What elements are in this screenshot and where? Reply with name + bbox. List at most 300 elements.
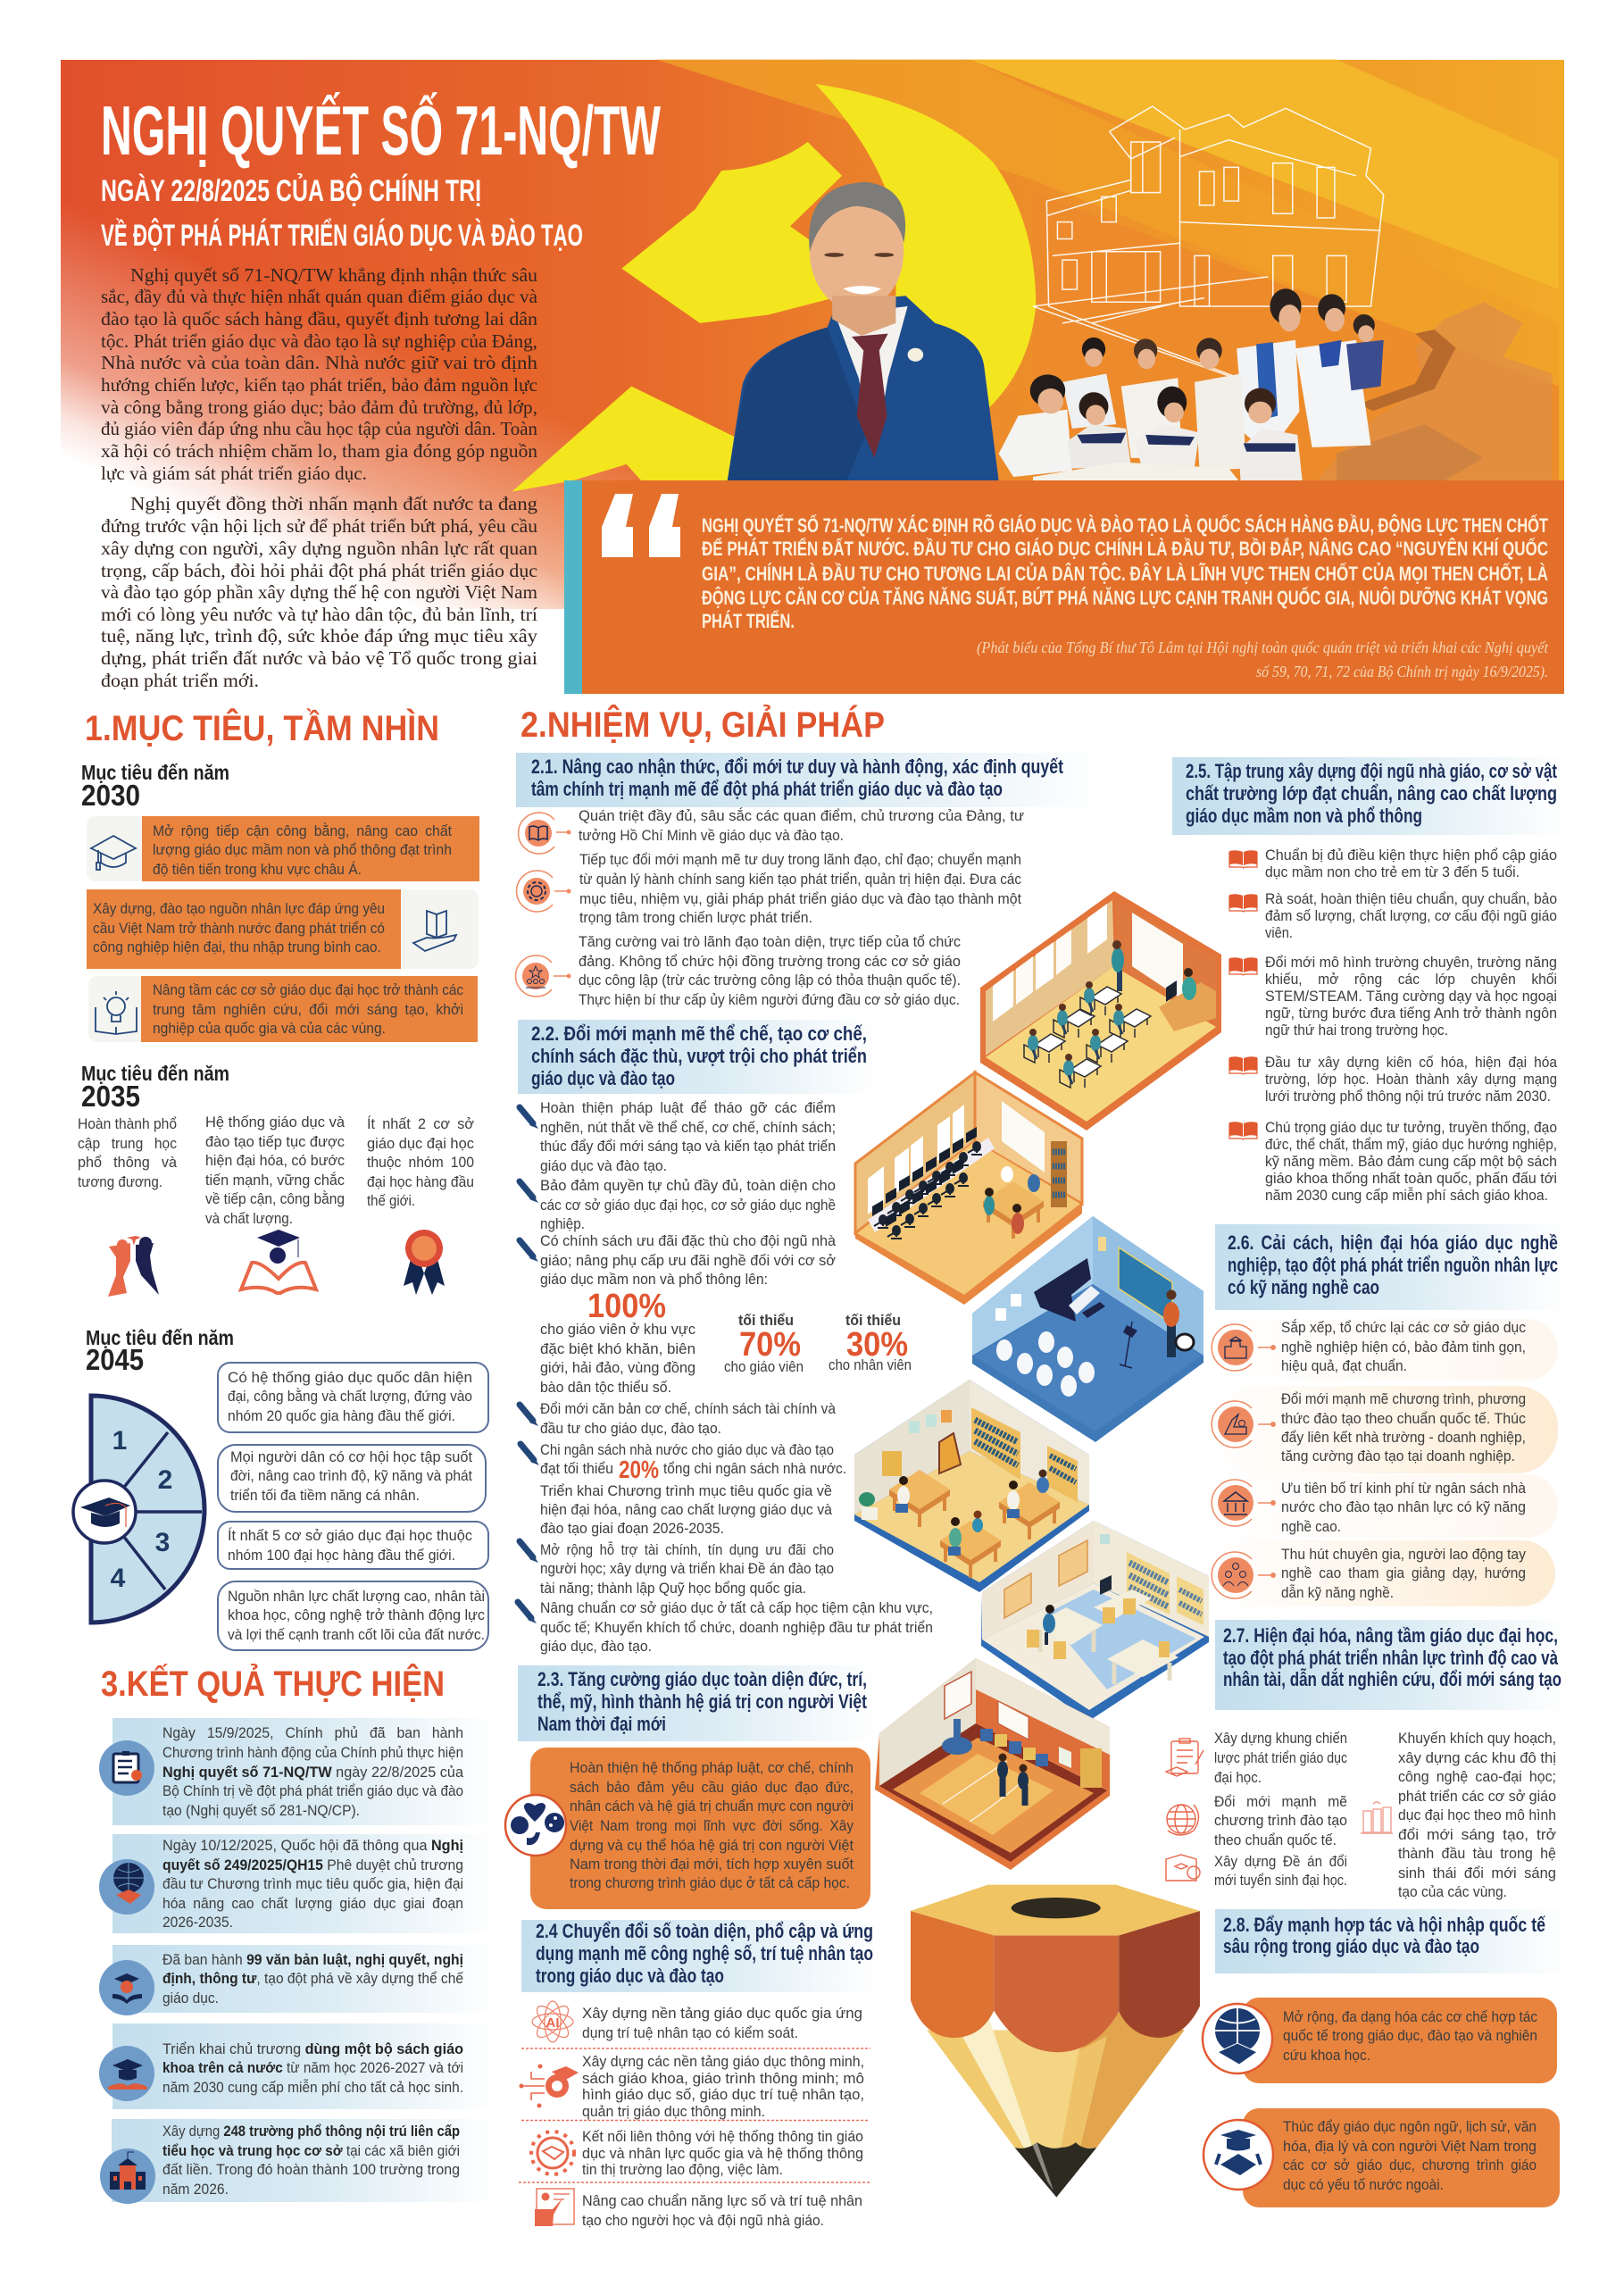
intro paragraphs: và đào tạo góp phần xây dựng thế hệ con người Việt Nam: [101, 581, 537, 603]
bullet 2.2 a: Hoàn thiện pháp luật để tháo gỡ các điểm: [540, 1099, 836, 1116]
item 2.6 b: Đổi mới mạnh mẽ chương trình, phương: [1281, 1390, 1526, 1407]
bullet 2.2 d: Đổi mới căn bản cơ chế, chính sách tài chính và: [540, 1400, 836, 1417]
bullet 2.2 d: [520, 1400, 836, 1437]
panel: 2.3 content: [505, 1748, 870, 1909]
2030 row 1: độ tiên tiến trong khu vực châu Á.: [153, 861, 362, 878]
result 4: năm 2030 cung cấp miễn phí cho tất cả học sinh.: [162, 2079, 463, 2096]
item 2.1 b: Tiếp tục đổi mới mạnh mẽ tư duy trong lãnh đạo, chỉ đạo; chuyển mạnh: [579, 851, 1021, 868]
item 2.4 b: sách giáo khoa, giáo trình thông minh; mô: [582, 2070, 864, 2087]
2045 box 2: triển tối đa tiềm năng cá nhân.: [230, 1487, 420, 1504]
list 2.5 b: viên.: [1265, 925, 1293, 941]
item 2.7 d: dục đại học theo mô hình: [1398, 1806, 1556, 1823]
bullet 2.2 e: [521, 1441, 846, 1537]
item 2.1 c: Thực hiện bí thư cấp ủy kiêm người đứng đầu cơ sở giáo dục.: [579, 991, 960, 1008]
list 2.5 e: đức, thể chất, thẩm mỹ, giáo dục hướng nghiệp,: [1265, 1137, 1557, 1153]
icon: globe and handshake: [1203, 2004, 1272, 2073]
heading: target 2045: 2045: [86, 1343, 144, 1376]
panel: 2.8 box 2: [1203, 2108, 1560, 2207]
item 2.7 b: chương trình đào tạo: [1214, 1812, 1347, 1829]
panel: 2.5 heading: giáo dục mầm non và phổ thông: [1186, 805, 1422, 827]
heading: target 2030: Mục tiêu đến năm: [81, 761, 229, 784]
result 2: [99, 1834, 497, 1933]
intro paragraphs: Nhà nước và của toàn dân. Nhà nước giữ vai trò định: [101, 352, 538, 373]
item 2.7 d: Khuyến khích quy hoạch,: [1398, 1730, 1556, 1747]
icon: experts meeting: [1212, 1552, 1276, 1598]
item 2.7 b: theo chuẩn quốc tế.: [1214, 1831, 1337, 1848]
2045 box 2: Mọi người dân có cơ hội học tập suốt: [230, 1448, 472, 1465]
result 1: Bộ Chính trị về đột phá phát triển giáo dục và đào: [162, 1783, 463, 1799]
icon: book: [1229, 1122, 1257, 1139]
result 5: đất liền. Trong đó hoàn thành 100 trường trong: [162, 2162, 460, 2178]
panel: 2.3 heading: thể, mỹ, hình thành hệ giá trị con người Việt: [537, 1690, 868, 1713]
list 2.5 c: STEM/STEAM. Tăng cường dạy và học ngoại: [1265, 989, 1557, 1005]
icon: AI atom: [532, 2001, 573, 2042]
panel: 2.4 heading: [521, 1920, 877, 1992]
bullet 2.2 c: [520, 1232, 837, 1288]
panel: 2.6 heading: [1215, 1224, 1569, 1310]
bullet 2.2 f: người học; xây dựng và triển khai Đề án đào tạo: [540, 1560, 834, 1577]
panel: 2.2 heading: [518, 1020, 877, 1094]
icon: cap on book: [108, 2059, 147, 2090]
icon: gear in circle: [517, 871, 571, 912]
result 2: 2026-2035.: [162, 1915, 233, 1931]
bullet 2.2 e: Triển khai Chương trình mục tiêu quốc gia về: [540, 1482, 832, 1499]
item 2.7 d: đổi mới sáng tạo, trở: [1398, 1826, 1556, 1843]
bullet 2.2 a: thúc đẩy đổi mới sáng tạo và kiến tạo phát triển: [540, 1138, 836, 1155]
result 4: Triển khai chủ trương dùng một bộ sách giáo: [162, 2041, 463, 2057]
stat 30%: cho nhân viên: [829, 1356, 912, 1373]
bullet 2.2 f: [520, 1541, 834, 1597]
stat 100%: đặc biệt khó khăn, biên: [540, 1340, 695, 1357]
bullet 2.2 e: hiện đại hóa, nâng cao chất lượng giáo dục và: [540, 1501, 832, 1518]
icon: book on hand: [413, 911, 456, 951]
intro paragraphs: sắc, đầy đủ và thực hiện nhất quán quan điểm giáo dục và: [101, 286, 538, 307]
title: [101, 91, 661, 253]
item 2.6 d: nghề cao tham gia giảng dạy, hướng: [1281, 1564, 1526, 1581]
panel: 2.6 heading: có kỹ năng nghề cao: [1228, 1276, 1379, 1298]
hero banner background: [61, 60, 1564, 609]
item 2.6 c: nghề cao.: [1281, 1518, 1341, 1535]
bullet 2.2 g: quốc tế; Khuyến khích tổ chức, doanh nghiệp đầu tư phát triển: [540, 1619, 933, 1636]
bullet 2.2 a: giáo dục và đào tạo.: [540, 1157, 667, 1174]
result 2: Ngày 10/12/2025, Quốc hội đã thông qua Nghị: [162, 1838, 463, 1854]
item 2.6 c: [1210, 1474, 1558, 1538]
item 2.1 b: trọng tâm trong chiến lược phát triển.: [579, 909, 812, 926]
2035 column 2: và chất lượng.: [205, 1210, 293, 1227]
stat 70%: tối thiểu: [738, 1312, 794, 1329]
item 2.6 b: [1210, 1386, 1558, 1473]
intro paragraphs: Nghị quyết đồng thời nhấn mạnh đất nước ta đang: [130, 493, 538, 514]
item 2.6 b: đẩy liên kết nhà trường - doanh nghiệp,: [1281, 1429, 1526, 1446]
icon: pen bullet: [520, 1107, 538, 1129]
2045 box 2: đời, nâng cao trình độ, kỹ năng và phát: [230, 1467, 472, 1484]
item 2.6 d: Thu hút chuyên gia, người lao động tay: [1281, 1546, 1526, 1563]
icon: connected handshake: [531, 2132, 574, 2174]
2035 column 3: đại học hàng đầu: [367, 1173, 474, 1190]
result 4: [99, 2023, 497, 2109]
bullet 2.2 e: Chi ngân sách nhà nước cho giáo dục và đào tạo: [540, 1441, 834, 1458]
item 2.6 a: nghề nghiệp hiện có, bảo đảm tinh gọn,: [1281, 1339, 1526, 1356]
panel: 2.1 heading: tâm chính trị mạnh mẽ để đột phá phát triển giáo dục và đào tạo: [531, 778, 1003, 800]
result 5: Xây dựng 248 trường phổ thông nội trú liên cấp: [162, 2123, 460, 2140]
panel: 2.3 heading: Nam thời đại mới: [537, 1713, 666, 1735]
panel: 2.8 box 2: hóa, địa lý và con người Việt Nam trong: [1283, 2138, 1537, 2155]
2035 column 3: giáo dục đại học: [367, 1135, 474, 1152]
item 2.7 b: Đổi mới mạnh mẽ: [1214, 1793, 1347, 1810]
stat 100%: cho giáo viên ở khu vực: [540, 1321, 695, 1338]
result 3: Đã ban hành 99 văn bản luật, nghị quyết, nghị: [162, 1952, 463, 1968]
isometric room: study hall: [981, 1521, 1209, 1721]
heading: target 2035: [81, 1062, 229, 1113]
panel: 2.3 content: Hoàn thiện hệ thống pháp luật, cơ chế, chính: [570, 1759, 854, 1776]
icon: teacher with board: [535, 2189, 574, 2226]
list 2.5 a: Chuẩn bị đủ điều kiện thực hiện phổ cập giáo: [1265, 847, 1557, 864]
item 2.7 d: sinh thái đổi mới sáng: [1398, 1865, 1556, 1881]
item 2.6 b: thức đào tạo theo chuẩn quốc tế. Thúc: [1281, 1410, 1526, 1427]
bullet 2.2 f: Mở rộng hỗ trợ tài chính, tín dụng ưu đãi cho: [540, 1541, 834, 1558]
heading: target 2030: [81, 761, 229, 812]
panel: 2.8 box 1: quốc tế trong giáo dục, đào tạo và nghiên: [1283, 2027, 1537, 2044]
result 1: Chương trình hành động của Chính phủ thực hiện: [162, 1745, 463, 1761]
item 2.4 a: [532, 2001, 862, 2042]
quote panel: [564, 480, 1564, 694]
panel: 2.3 content: dựng và cụ thể hóa hệ giá trị con người Việt: [570, 1837, 854, 1854]
quote panel: số 59, 70, 71, 72 của Bộ Chính trị ngày 16/9/2025).: [1256, 663, 1548, 681]
panel: 2.8 heading: 2.8. Đẩy mạnh hợp tác và hội nhập quốc tế: [1223, 1914, 1546, 1936]
panel: 2.4 heading: trong giáo dục và đào tạo: [536, 1965, 724, 1987]
result 3: giáo dục.: [162, 1990, 219, 2007]
semicircle diagram 2045: 2: [158, 1465, 172, 1495]
item 2.1 b: mục tiêu, nhiệm vụ, giải pháp phát triển giáo dục và đào tạo thành một: [579, 890, 1021, 907]
item 2.1 a: tưởng Hồ Chí Minh về giáo dục và đào tạo.: [579, 827, 844, 844]
icon: bank in circle: [1212, 1480, 1276, 1526]
item 2.6 c: nước cho đào tạo nhân lực có kỹ năng: [1281, 1498, 1526, 1515]
panel: 2.8 box 1: Mở rộng, đa dạng hóa các cơ chế hợp tác: [1283, 2008, 1537, 2025]
icon: graduation cap: [80, 1498, 130, 1527]
bullet 2.2 f: tài năng; thành lập Quỹ học bổng quốc gia.: [540, 1580, 806, 1597]
item 2.7 a: [1166, 1730, 1347, 1786]
2045 box 3: Ít nhất 5 cơ sở giáo dục đại học thuộc: [228, 1527, 472, 1544]
list 2.5 e: giáo khoa thống nhất toàn quốc, phấn đấu tới: [1265, 1171, 1557, 1187]
item 2.7 d: [1361, 1730, 1556, 1900]
panel: 2.3 heading: 2.3. Tăng cường giáo dục toàn diện đức, trí,: [537, 1668, 867, 1690]
panel: 2.4 heading: dụng mạnh mẽ công nghệ số, trí tuệ nhân tạo: [536, 1942, 873, 1965]
result 3: [99, 1945, 497, 2015]
list 2.5 a: dục mầm non cho trẻ em từ 3 đến 5 tuổi.: [1265, 864, 1520, 880]
portrait of General Secretary: [728, 182, 999, 480]
intro paragraphs: đứng trước vận hội lịch sử để phát triển bứt phá, yêu cầu: [101, 515, 538, 537]
panel: 2.2 heading: 2.2. Đổi mới mạnh mẽ thể chế, tạo cơ chế,: [531, 1022, 867, 1045]
2035 column 1: phổ thông và: [78, 1154, 178, 1171]
list 2.5 c: [1229, 955, 1557, 1039]
result 1: tạo (Nghị quyết số 281-NQ/CP).: [162, 1803, 360, 1819]
stat 30%: [829, 1312, 912, 1373]
item 2.4 b: quản trị giáo dục thông minh.: [582, 2103, 765, 2120]
isometric room: library: [854, 1380, 1089, 1592]
intro paragraphs: đủ giáo viên đáp ứng nhu cầu học tập của người dân. Toàn: [101, 418, 537, 439]
icon: pen bullet: [521, 1444, 539, 1465]
icon: people reaching star: [108, 1230, 159, 1297]
panel: 2.1 heading: [516, 753, 1105, 807]
heading: section 3: 3.KẾT QUẢ THỰC HIỆN: [101, 1663, 445, 1704]
result 4: khoa trên cả nước từ năm học 2026-2027 và tới: [162, 2060, 463, 2076]
semicircle diagram 2045: 3: [155, 1528, 170, 1557]
2045 box 4: [218, 1581, 488, 1650]
bullet 2.2 b: các cơ sở giáo dục đại học, cơ sở giáo dục nghề: [540, 1197, 836, 1214]
icon: graduation cap: [91, 836, 136, 870]
intro paragraphs: mới có lòng yêu nước và tự hào dân tộc, đủ bản lĩnh, trí: [101, 604, 537, 625]
bullet 2.2 c: giáo dục mầm non và phổ thông lên:: [540, 1271, 768, 1288]
intro paragraphs: đào tạo là quốc sách hàng đầu, quyết định tương lai dân: [101, 308, 538, 330]
bullet 2.2 c: giáo; nâng phụ cấp ưu đãi nghề đối với cơ sở: [540, 1252, 836, 1269]
panel: 2.5 heading: [1172, 757, 1569, 835]
icon: light bulb on book: [96, 991, 137, 1034]
item 2.7 a: đại học.: [1214, 1769, 1262, 1786]
icon: book: [1229, 1056, 1257, 1074]
icon: cap and handshake: [1203, 2120, 1273, 2190]
list 2.5 d: [1229, 1055, 1558, 1105]
list 2.5 e: năm 2030 cung cấp miễn phí sách giáo khoa.: [1265, 1187, 1548, 1204]
item 2.4 d: Nâng cao chuẩn năng lực số và trí tuệ nhân: [582, 2192, 862, 2209]
intro paragraphs: lực và giám sát phát triển giáo dục.: [101, 463, 367, 484]
2045 box 2: [218, 1445, 486, 1512]
isometric room: classroom: [980, 891, 1221, 1130]
bullet 2.2 g: Nâng chuẩn cơ sở giáo dục ở tất cả cấp học tiệm cận khu vực,: [540, 1599, 933, 1616]
item 2.4 d: tạo cho người học và đội ngũ nhà giáo.: [582, 2212, 824, 2229]
2030 row 3: Nâng tầm các cơ sở giáo dục đại học trở thành các: [153, 981, 463, 998]
item 2.1 b: từ quản lý hành chính sang kiến tạo phát triển, quản trị hiện đại. Đưa các: [579, 871, 1021, 888]
list 2.5 d: Đầu tư xây dựng kiên cố hóa, hiện đại hóa: [1265, 1055, 1558, 1071]
item 2.4 a: AI: [546, 2015, 559, 2031]
title: NGÀY 22/8/2025 CỦA BỘ CHÍNH TRỊ: [101, 173, 481, 208]
pencil illustration: [911, 1885, 1200, 2198]
semicircle diagram 2045: 4: [111, 1564, 126, 1593]
item 2.7 d: tạo của các vùng.: [1398, 1883, 1507, 1900]
2035 column 3: Ít nhất 2 cơ sở: [367, 1115, 474, 1132]
intro paragraphs: dựng, phát triển đất nước và bảo vệ Tổ quốc trong giai: [101, 647, 537, 669]
item 2.7 b: [1167, 1793, 1347, 1848]
title: VỀ ĐỘT PHÁ PHÁT TRIỂN GIÁO DỤC VÀ ĐÀO TẠO: [101, 218, 583, 253]
item 2.7 c: Xây dựng Đề án đổi: [1214, 1853, 1347, 1870]
result 5: tiểu học và trung học cơ sở tại các xã biên giới: [162, 2143, 460, 2159]
2035 column 2: [205, 1114, 346, 1227]
result 5: [100, 2119, 497, 2204]
panel: 2.8 box 2: dục có yếu tố nước ngoài.: [1283, 2176, 1444, 2193]
result 2: đầu tư Chương trình mục tiêu quốc gia, hiện đại: [162, 1876, 463, 1892]
2030 row 2: công nghiệp hiện đại, thu nhập trung bình cao.: [93, 939, 381, 955]
panel: 2.8 box 2: Thúc đẩy giáo dục ngôn ngữ, lịch sử, văn: [1283, 2118, 1537, 2135]
isometric room: gym: [875, 1658, 1110, 1870]
heading: target 2045: Mục tiêu đến năm: [86, 1326, 234, 1349]
result 1: Ngày 15/9/2025, Chính phủ đã ban hành: [162, 1725, 463, 1741]
2035 column 2: về tiếp cận, công bằng: [205, 1190, 345, 1207]
panel: 2.3 heading: [518, 1665, 877, 1741]
item 2.6 b: tăng cường đào tạo tại doanh nghiệp.: [1281, 1448, 1515, 1464]
list 2.5 c: Đổi mới mô hình trường chuyên, trường năng: [1265, 955, 1557, 971]
panel: 2.3 content: sách bảo đảm yêu cầu giáo dục đạo đức,: [570, 1779, 854, 1796]
list 2.5 c: ngữ thứ hai trong trường học.: [1265, 1022, 1448, 1039]
item 2.7 a: Xây dựng khung chiến: [1214, 1730, 1347, 1747]
list 2.5 d: trường, lớp học. Hoàn thành xây dựng mạng: [1265, 1072, 1557, 1088]
item 2.7 a: lược phát triển giáo dục: [1214, 1749, 1347, 1766]
2045 box 1: nhóm 20 quốc gia hàng đầu thế giới.: [228, 1407, 455, 1424]
intro paragraphs: Nghị quyết số 71-NQ/TW khẳng định nhận thức sâu: [130, 264, 538, 286]
item 2.6 a: [1210, 1319, 1558, 1381]
item 2.4 b: [520, 2053, 864, 2120]
bullet 2.2 a: nghẽn, nút thắt về thể chế, cơ chế, chính sách;: [540, 1119, 836, 1136]
panel: 2.8 box 1: cứu khoa học.: [1283, 2047, 1370, 2064]
list 2.5 c: ngữ, từng bước đưa tiếng Anh trở thành ngôn: [1265, 1005, 1557, 1022]
panel: 2.1 heading: 2.1. Nâng cao nhận thức, đổi mới tư duy và hành động, xác định quyết: [531, 755, 1064, 778]
bullet 2.2 e: 20%: [619, 1456, 659, 1483]
2045 box 4: và lợi thế cạnh tranh cốt lõi của đất nước.: [228, 1626, 485, 1643]
result 1: Nghị quyết số 71-NQ/TW ngày 22/8/2025 của: [162, 1765, 464, 1781]
stat 70%: 70%: [739, 1326, 801, 1364]
item 2.6 a: Sắp xếp, tổ chức lại các cơ sở giáo dục: [1281, 1319, 1526, 1336]
heading: section 1: 1.MỤC TIÊU, TẦM NHÌN: [85, 707, 439, 748]
title: NGHỊ QUYẾT SỐ 71-NQ/TW: [101, 91, 661, 170]
bullet 2.2 g: giáo dục, đào tạo.: [540, 1638, 652, 1655]
2035 column 1: [78, 1115, 178, 1190]
item 2.1 a: [519, 807, 1024, 854]
panel: 2.3 content: nhân cách và hệ giá trị chuẩn mực con người: [570, 1798, 854, 1815]
2030 row 2: cầu Việt Nam trở thành nước đang phát triển có: [93, 920, 385, 937]
2030 row 3: nghiệp của quốc gia và của các vùng.: [153, 1020, 386, 1037]
result 2: hóa nâng cao chất lượng giáo dục giai đoạn: [162, 1896, 463, 1912]
hammer and sickle emblem: [512, 84, 1036, 492]
icon: strategy clipboard: [1166, 1739, 1203, 1776]
item 2.1 c: Tăng cường vai trò lãnh đạo toàn diện, trực tiếp của tổ chức: [579, 933, 961, 950]
icon: team with star: [516, 955, 571, 997]
item 2.7 c: [1166, 1853, 1347, 1889]
item 2.4 c: dục và nhân lực quốc gia và hệ thống thông: [582, 2145, 863, 2162]
list 2.5 e: kỹ năng mềm. Bảo đảm cung cấp một bộ sách: [1265, 1154, 1557, 1170]
2035 column 2: tiến mạnh, vững chắc: [205, 1172, 345, 1189]
list 2.5 c: khiếu, mở rộng các lớp chuyên khối: [1265, 972, 1557, 988]
isometric room: computer lab: [855, 1072, 1082, 1305]
panel: 2.8 box 2: các cơ sở giáo dục, chương trình giáo: [1283, 2157, 1537, 2173]
list 2.5 d: lưới trường phổ thông nội trú trước năm 2030.: [1265, 1089, 1551, 1105]
stat 100%: 100%: [587, 1288, 666, 1325]
stat 70%: [724, 1312, 804, 1375]
intro paragraphs: hướng chiến lược, kiến tạo phát triển, bảo đảm nguồn lực: [101, 374, 537, 396]
icon: book: [1229, 850, 1257, 868]
2030 row 2: [87, 889, 479, 969]
heading: section 2: 2.NHIỆM VỤ, GIẢI PHÁP: [521, 704, 885, 745]
panel: 2.3 content: trong chương trình giáo dục ở tất cả cấp học.: [570, 1874, 850, 1891]
intro paragraphs: trọng, cấp bách, đòi hỏi phải đột phá phát triển giáo dục: [101, 560, 537, 581]
item 2.1 c: đảng. Không tổ chức hội đồng trường trong các cơ sở giáo: [579, 953, 961, 970]
list 2.5 b: Rà soát, hoàn thiện tiêu chuẩn, quy chuẩn, bảo: [1265, 891, 1557, 907]
item 2.4 b: hình giáo dục số, giáo dục trí tuệ nhân tạo,: [582, 2086, 864, 2103]
intro paragraphs: tuệ, năng lực, trình độ, sức khỏe đáp ứng mục tiêu xây: [101, 625, 538, 647]
bullet 2.2 d: đầu tư cho giáo dục, đào tạo.: [540, 1420, 721, 1437]
2035 column 1: Hoàn thành phổ: [78, 1115, 177, 1132]
heading: target 2030: 2030: [81, 779, 140, 812]
bullet 2.2 e: tổng chi ngân sách nhà nước.: [663, 1460, 846, 1477]
2035 column 3: thuộc nhóm 100: [367, 1154, 474, 1171]
intro paragraphs: và công bằng trong giáo dục; bảo đảm đủ trường, đủ lớp,: [101, 396, 537, 418]
item 2.6 c: Ưu tiên bố trí kinh phí từ ngân sách nhà: [1281, 1480, 1526, 1497]
icon: book: [1229, 894, 1257, 912]
bullet 2.2 b: Bảo đảm quyền tự chủ đầy đủ, toàn diện cho: [540, 1177, 836, 1194]
icon: school in circle: [1212, 1324, 1276, 1371]
panel: 2.2 heading: chính sách đặc thù, vượt trội cho phát triển: [531, 1045, 867, 1067]
2045 box 4: Nguồn nhân lực chất lượng cao, nhân tài: [228, 1588, 485, 1605]
list 2.5 e: Chú trọng giáo dục tư tưởng, truyền thống, đạo: [1265, 1120, 1557, 1136]
2030 row 2: Xây dựng, đào tạo nguồn nhân lực đáp ứng yêu: [93, 900, 385, 917]
2045 box 4: khoa học, công nghệ trở thành động lực: [228, 1606, 485, 1623]
list 2.5 a: [1229, 847, 1557, 880]
icon: digital cap gear: [520, 2065, 579, 2107]
quote panel: (Phát biểu của Tổng Bí thư Tô Lâm tại Hội nghị toàn quốc quán triệt và triển khai các Nghị quyết: [977, 638, 1549, 657]
2035 column 1: tương đương.: [78, 1173, 162, 1190]
icon: graduate and book: [112, 1973, 142, 2004]
icon: award ribbon: [404, 1230, 445, 1295]
isometric room: music room: [972, 1216, 1203, 1442]
stat 30%: 30%: [846, 1326, 908, 1364]
item 2.4 d: [535, 2189, 862, 2229]
bullet 2.2 g: [518, 1599, 933, 1655]
bullet 2.2 e: đào tạo giai đoạn 2026-2035.: [540, 1520, 724, 1537]
intro paragraphs: xây dựng con người, xây dựng nguồn nhân lực rất quan: [101, 538, 538, 559]
2035 column 2: Hệ thống giáo dục và: [205, 1114, 346, 1130]
icon: pen bullet: [520, 1181, 538, 1203]
icon: globe with handshake: [113, 1863, 144, 1904]
heading: target 2035: 2035: [81, 1080, 140, 1113]
item 2.4 c: [531, 2128, 863, 2178]
icon: pen bullet: [520, 1240, 538, 1262]
item 2.4 c: tin thị trường lao động, việc làm.: [582, 2161, 783, 2178]
icon: checklist clipboard: [113, 1751, 142, 1782]
2030 row 1: [87, 816, 479, 881]
2035 column 2: hiện đại hóa, có bước: [205, 1152, 345, 1169]
panel: 2.3 content: Việt Nam trong mọi lĩnh vực đời sống. Xây: [570, 1817, 854, 1834]
panel: 2.7 heading: [1215, 1620, 1569, 1710]
item 2.7 d: phát triển các cơ sở giáo: [1398, 1788, 1556, 1805]
icon: heart brain palette muscle: [505, 1795, 566, 1856]
heading: target 2035: Mục tiêu đến năm: [81, 1062, 229, 1085]
item 2.6 d: [1210, 1540, 1555, 1606]
panel: 2.4 heading: 2.4 Chuyển đổi số toàn diện, phổ cập và ứng: [536, 1920, 873, 1942]
intro paragraphs: xã hội có trách nhiệm chăm lo, tham gia đóng góp nguồn: [101, 440, 538, 462]
panel: 2.8 heading: [1215, 1909, 1569, 1973]
2045 box 3: [218, 1522, 488, 1569]
item 2.7 d: công nghệ cao-đại học;: [1398, 1768, 1556, 1785]
semicircle diagram 2045: [73, 1396, 204, 1623]
list 2.5 e: [1229, 1120, 1557, 1204]
item 2.6 d: dẫn kỹ năng nghề.: [1281, 1584, 1394, 1601]
bullet 2.2 e: đạt tối thiểu: [540, 1460, 613, 1477]
2035 column 3: thế giới.: [367, 1192, 415, 1209]
bullet 2.2 c: Có chính sách ưu đãi đặc thù cho đội ngũ nhà: [540, 1232, 837, 1249]
heading: target 2045: [86, 1326, 234, 1376]
result 3: định, thông tư, tạo đột phá về xây dựng thể chế: [162, 1971, 463, 1987]
building line art: [1033, 106, 1384, 387]
icon: graduate with open book: [241, 1230, 316, 1293]
stat 100%: bào dân tộc thiểu số.: [540, 1379, 671, 1396]
icon: school building: [110, 2152, 146, 2190]
icon: pen bullet: [520, 1541, 538, 1563]
list 2.5 b: đảm số lượng, chất lượng, cơ cấu đội ngũ giáo: [1265, 908, 1557, 924]
item 2.1 b: [517, 851, 1021, 926]
2035 column 1: cập trung học: [78, 1135, 177, 1152]
panel: 2.3 content: Nam trong thời đại mới, tích hợp xuyên suốt: [570, 1856, 854, 1873]
panel: 2.2 heading: giáo dục và đào tạo: [531, 1067, 675, 1089]
intro paragraphs: đoạn phát triển mới.: [101, 670, 259, 691]
semicircle diagram 2045: 1: [112, 1426, 127, 1456]
2030 row 1: lượng giáo dục mầm non và phổ thông đạt trình: [153, 841, 452, 858]
